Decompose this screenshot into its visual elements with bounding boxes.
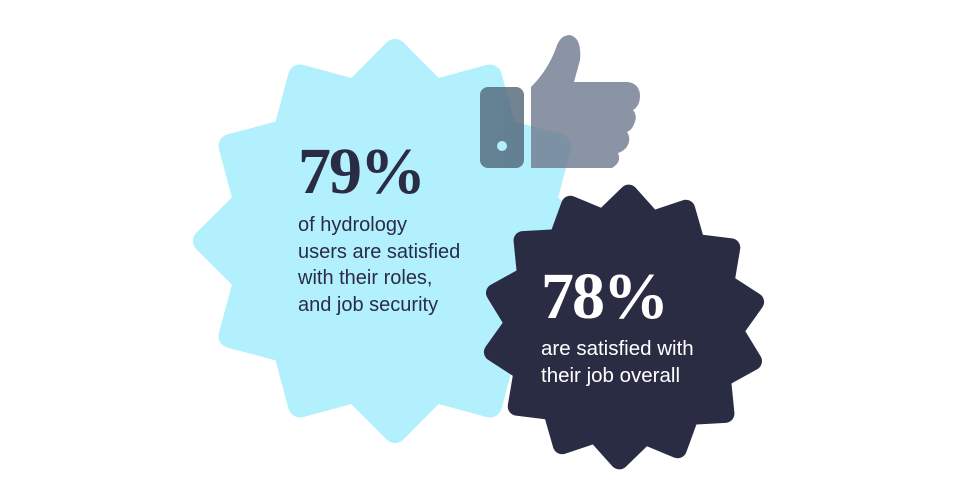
text: 79% description: with their roles, xyxy=(298,267,432,289)
dot on icon xyxy=(497,141,507,151)
text: 79% description: of hydrology xyxy=(298,214,407,236)
stat: 78%: 78% xyxy=(541,260,667,333)
text: 78% description xyxy=(541,337,694,386)
text: 79% description: and job security xyxy=(298,294,438,316)
text: 79% description xyxy=(298,214,460,316)
text: 78% description: their job overall xyxy=(541,364,680,386)
light blue star xyxy=(205,51,585,431)
thumbs up icon xyxy=(480,35,640,168)
stat: 79%: 79% xyxy=(298,135,424,208)
dark navy star xyxy=(493,194,755,460)
text: 78% description: are satisfied with xyxy=(541,337,694,360)
text: 79% description: users are satisfied xyxy=(298,240,460,262)
